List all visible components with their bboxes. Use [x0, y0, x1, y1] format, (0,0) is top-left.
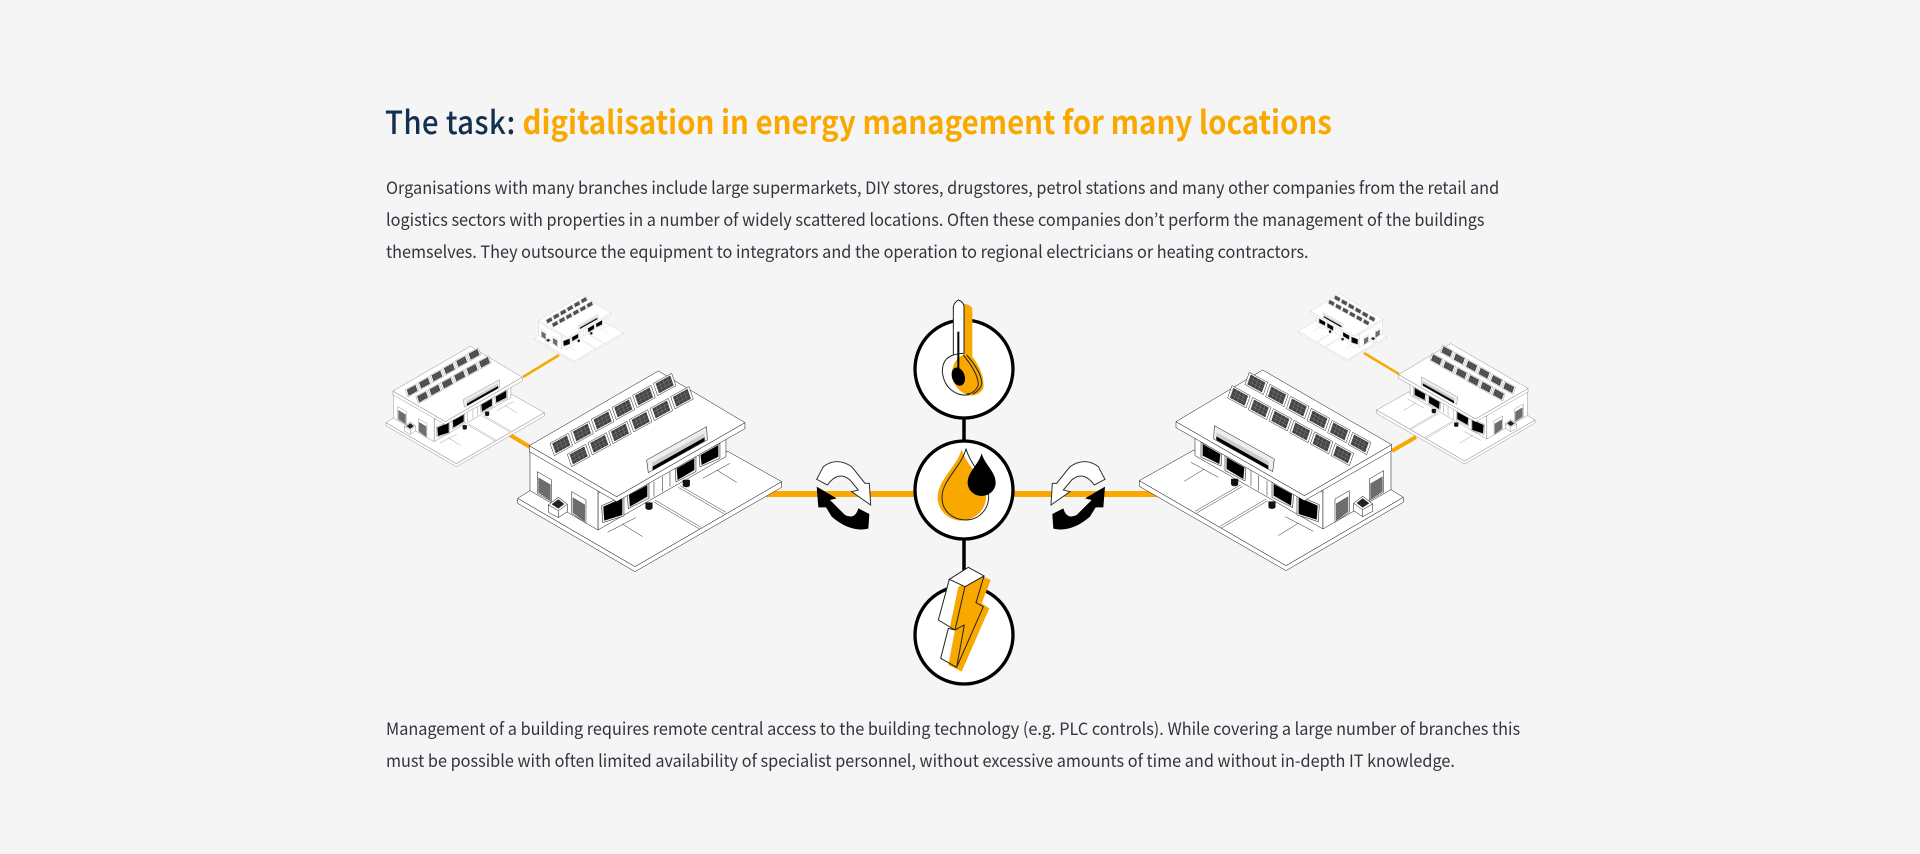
connector: left small buildings [510, 355, 559, 447]
icon group [817, 300, 1105, 684]
intro text: logistics sectors with properties in a number of widely scattered locations. Often these companies don’t perform the management of the buildings [386, 206, 1485, 231]
icon: oil and water drops [915, 441, 1013, 539]
closing text: Management of a building requires remote central access to the building technology (e.g. PLC controls). While covering a large number of branches this [386, 715, 1520, 740]
icon: thermometer [915, 300, 1013, 418]
main orange line [766, 491, 1158, 497]
building: left near [518, 371, 782, 572]
building: right far [1298, 294, 1387, 361]
vertical connectors [962, 410, 966, 572]
connector: right small buildings [1364, 353, 1416, 451]
building: left middle [386, 346, 544, 467]
title: The task: digitalisation in energy management for many locations [385, 98, 1332, 144]
intro text [386, 174, 1499, 263]
intro text: themselves. They outsource the equipment to integrators and the operation to regional electricians or heating contractors. [386, 238, 1309, 263]
icon: right exchange arrows [1051, 462, 1105, 529]
building: right near [1139, 370, 1403, 571]
closing text: must be possible with often limited availability of specialist personnel, without excessive amounts of time and without in-depth IT knowledge. [386, 747, 1455, 772]
closing text [386, 715, 1520, 772]
intro text: Organisations with many branches include large supermarkets, DIY stores, drugstores, petrol stations and many other companies from the retail and [386, 174, 1499, 199]
building: right middle [1377, 344, 1535, 464]
building: left far [535, 296, 623, 363]
icon: left exchange arrows [817, 462, 871, 529]
icon: lightning bolt [915, 567, 1013, 684]
